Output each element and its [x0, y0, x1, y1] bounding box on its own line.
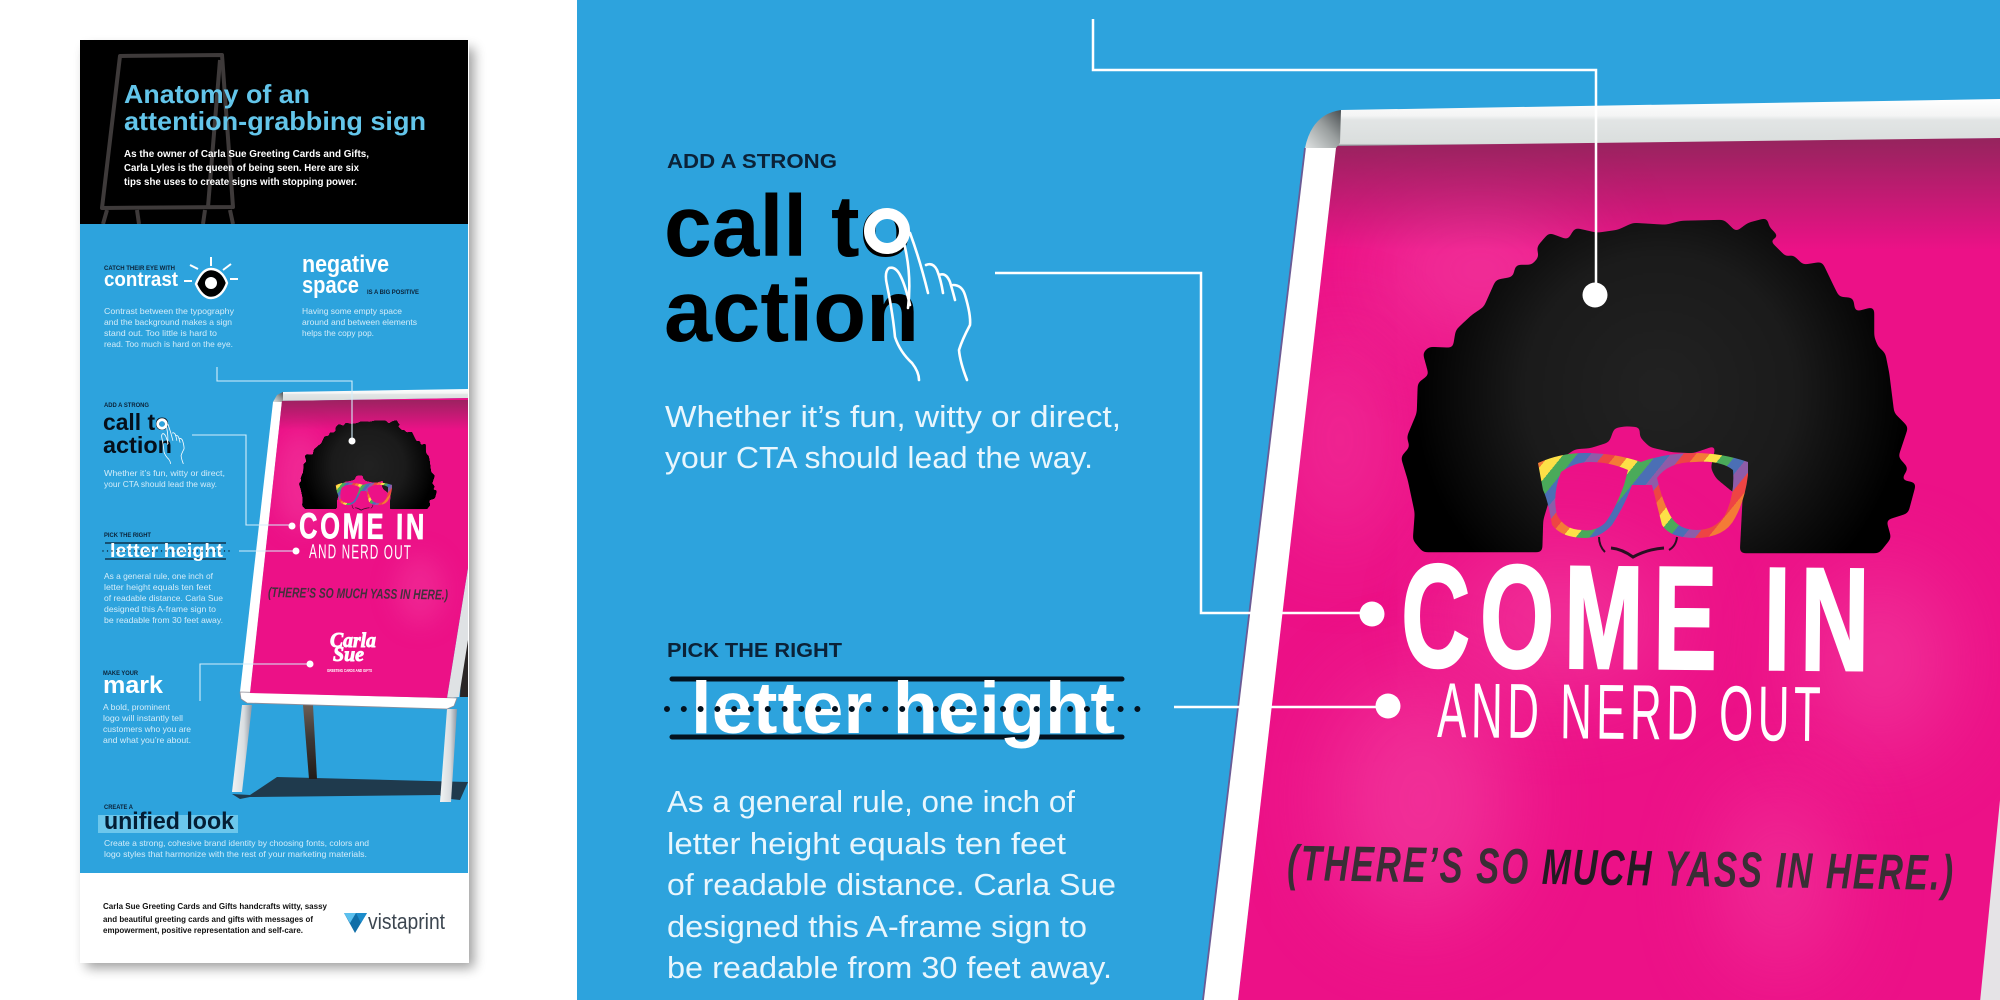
- callout dots: [1360, 282, 1608, 718]
- tip: make your mark: logo will instantly tell: [103, 713, 183, 723]
- rear leg: [303, 705, 317, 779]
- icon: easel outline: [102, 55, 233, 224]
- footer text: and beautiful greeting cards and gifts with messages of: [103, 914, 313, 924]
- tip: negative space: IS A BIG POSITIVE: [367, 290, 419, 296]
- tip: letter height heading: [667, 640, 1139, 749]
- tip: call to action heading: call to: [664, 178, 912, 275]
- sign subheadline: AND NERD OUT: [309, 541, 412, 564]
- tip: negative space: around and between elements: [302, 317, 417, 327]
- tip: letter height: letter height: [110, 541, 224, 562]
- tip: call to action heading: action: [664, 263, 919, 360]
- tip: letter height: designed this A-frame sign to: [104, 604, 216, 614]
- tip: negative space: negative: [302, 251, 389, 278]
- title: attention-grabbing sign: [124, 106, 426, 136]
- logo: Carla Sue: GREETING CARDS AND GIFTS: [327, 668, 372, 673]
- tip: unified look: unified look: [104, 808, 235, 835]
- pink sign face: [1230, 130, 2000, 1000]
- intro text: [124, 148, 369, 188]
- metal frame: [1203, 99, 2000, 1000]
- tip: negative space: helps the copy pop.: [302, 328, 374, 338]
- letter height body: be readable from 30 feet away.: [667, 950, 1112, 985]
- footer text: empowerment, positive representation and self-care.: [103, 925, 303, 935]
- panel: blue body: [80, 224, 468, 873]
- logo: Carla Sue: Sue: [333, 642, 364, 666]
- tip: make your mark: and what you’re about.: [103, 735, 191, 745]
- legs: [232, 705, 457, 802]
- tip: make your mark: [103, 670, 191, 745]
- tip: call to action: ADD A STRONG: [104, 402, 149, 409]
- title: Anatomy of an: [124, 79, 310, 109]
- illustration: small A-frame sign: [192, 367, 470, 802]
- footer text: [103, 901, 327, 935]
- icon: tap ring: [158, 420, 166, 428]
- icon: eye: [184, 257, 238, 298]
- intro text: Carla Lyles is the queen of being seen. Here are six: [124, 162, 359, 174]
- call to action body: your CTA should lead the way.: [665, 440, 1093, 475]
- tip: letter height: As a general rule, one inch of: [104, 571, 214, 581]
- logo: vistaprint: vistaprint: [368, 909, 445, 934]
- footer text: Carla Sue Greeting Cards and Gifts handcrafts witty, sassy: [103, 901, 327, 911]
- sign shadow: [232, 777, 468, 800]
- logo: Carla Sue: [327, 628, 376, 673]
- panel: black header: [80, 40, 468, 224]
- tip: call to action heading: [664, 151, 970, 380]
- call to action body: [665, 399, 1121, 475]
- panel: infographic card with shadow: [80, 40, 474, 968]
- letter height body: [667, 784, 1116, 985]
- tip: call to action heading: ADD A STRONG: [667, 151, 837, 173]
- tip: contrast: and the background makes a sign: [104, 317, 232, 327]
- tip: contrast: [104, 257, 238, 349]
- icon: hand: [162, 424, 184, 464]
- tip: call to action: call to: [103, 409, 169, 435]
- pink sign face: [240, 395, 470, 705]
- tip: make your mark: mark: [103, 672, 164, 699]
- tip: letter height: be readable from 30 feet away.: [104, 615, 223, 625]
- tip: contrast: Contrast between the typography: [104, 306, 235, 316]
- icon: hand: [886, 233, 970, 380]
- tip: contrast: contrast: [104, 269, 178, 291]
- tip: unified look: logo styles that harmonize with the rest of your marketing materials.: [104, 849, 367, 859]
- callout connectors: [995, 19, 1596, 707]
- call to action body: Whether it’s fun, witty or direct,: [665, 399, 1121, 434]
- tip: make your mark: A bold, prominent: [103, 702, 171, 712]
- tip: call to action: action: [103, 432, 172, 458]
- hair and glasses illustration: [1401, 218, 1916, 557]
- tip: make your mark: MAKE YOUR: [103, 670, 138, 677]
- callout connectors: [192, 367, 352, 701]
- letter height body: of readable distance. Carla Sue: [667, 867, 1116, 902]
- logo: vistaprint: [344, 909, 445, 934]
- callout dots: [288, 438, 356, 668]
- tip: call to action: your CTA should lead the way.: [104, 479, 217, 489]
- panel: enlarged detail: [577, 0, 2000, 1000]
- tip: letter height heading: letter height: [691, 668, 1115, 749]
- intro text: tips she uses to create signs with stopping power.: [124, 176, 357, 188]
- tip: contrast: read. Too much is hard on the eye.: [104, 339, 233, 349]
- letter height body: As a general rule, one inch of: [667, 784, 1075, 819]
- title: [124, 79, 426, 136]
- tip: contrast: CATCH THEIR EYE WITH: [104, 265, 175, 272]
- frame: [240, 389, 468, 709]
- tip: letter height: of readable distance. Carla Sue: [104, 593, 223, 603]
- tip: negative space: space: [302, 272, 359, 299]
- tip: unified look: [98, 804, 369, 859]
- letter height body: designed this A-frame sign to: [667, 909, 1087, 944]
- sign headline: COME IN: [299, 505, 427, 547]
- logo: Carla Sue: Carla: [330, 628, 376, 652]
- tip: call to action: Whether it’s fun, witty or direct,: [104, 468, 225, 478]
- sign tagline: (THERE’S SO MUCH YASS IN HERE.): [268, 584, 448, 603]
- tip: make your mark: customers who you are: [103, 724, 191, 734]
- illustration: sign close-up: [1203, 99, 2000, 1000]
- tip: letter height: [103, 532, 230, 625]
- hair and glasses illustration: [299, 420, 437, 510]
- tip: unified look: Create a strong, cohesive brand identity by choosing fonts, colors and: [104, 838, 369, 848]
- tip: negative space: Having some empty space: [302, 306, 402, 316]
- icon: tap ring: [870, 214, 904, 248]
- tip: letter height: letter height equals ten feet: [104, 582, 212, 592]
- tip: call to action: [103, 402, 225, 489]
- tip: letter height heading: PICK THE RIGHT: [667, 640, 842, 662]
- tip: unified look: CREATE A: [104, 804, 133, 811]
- intro text: As the owner of Carla Sue Greeting Cards and Gifts,: [124, 148, 369, 160]
- tip: negative space: [302, 251, 419, 338]
- letter height body: letter height equals ten feet: [667, 826, 1066, 861]
- tip: contrast: stand out. Too little is hard to: [104, 328, 217, 338]
- tip: letter height: PICK THE RIGHT: [104, 532, 151, 539]
